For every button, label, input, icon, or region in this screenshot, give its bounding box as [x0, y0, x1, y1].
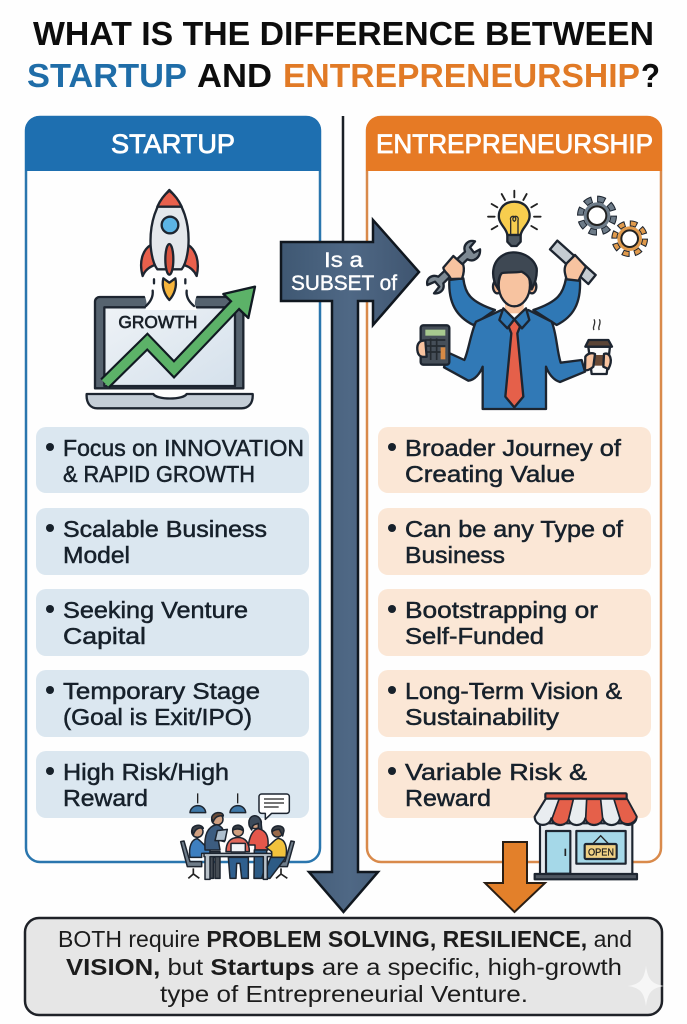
- entrepreneurship point 2: Can be any Type of: [405, 516, 624, 542]
- entrepreneurship point 1: [378, 427, 651, 493]
- back arms: [449, 278, 580, 325]
- entrepreneurship point 2: Business: [405, 542, 505, 568]
- title: ENTREPRENEURSHIP: [283, 57, 640, 94]
- callout: conclusion: BOTH require PROBLEM SOLVING, RESILIENCE, and: [58, 926, 632, 952]
- startup point 4: Temporary Stage: [63, 678, 260, 704]
- entrepreneurship point 4: Long-Term Vision &: [405, 678, 622, 704]
- panel: startup: [25, 116, 321, 862]
- startup point 3: Seeking Venture: [63, 597, 248, 623]
- head: [493, 252, 537, 313]
- startup point 1: Focus on INNOVATION: [63, 435, 304, 461]
- entrepreneurship point 3: Self-Funded: [405, 623, 544, 649]
- startup point 5: [36, 751, 309, 818]
- entrepreneurship point 5: Variable Risk &: [405, 759, 587, 785]
- icon: light bulb: [488, 191, 541, 246]
- calculator: [417, 325, 449, 365]
- startup point 3: Capital: [63, 623, 146, 649]
- panel: startup: STARTUP: [111, 129, 235, 159]
- hands up: [443, 255, 586, 281]
- panel: entrepreneurship: ENTREPRENEURSHIP: [376, 129, 653, 159]
- startup point 2: Model: [63, 542, 130, 568]
- body: [444, 310, 585, 409]
- startup point 1: [36, 427, 309, 493]
- title: STARTUP: [27, 57, 187, 94]
- entrepreneurship point 3: Bootstrapping or: [405, 597, 598, 623]
- entrepreneurship point 1: Creating Value: [405, 461, 575, 487]
- icon: rocket and growth laptop: [87, 190, 255, 408]
- title: [27, 15, 660, 94]
- ruler: [550, 241, 596, 284]
- panel: entrepreneurship: [366, 116, 662, 862]
- startup point 2: Scalable Business: [63, 516, 267, 542]
- arrow label: Is a: [324, 249, 363, 272]
- arrow label: SUBSET of: [291, 272, 397, 295]
- icon: multitasking entrepreneur: [417, 191, 645, 409]
- startup point 1: & RAPID GROWTH: [63, 461, 255, 487]
- title: AND: [197, 57, 272, 94]
- startup point 2: [36, 508, 309, 575]
- startup point 4: [36, 670, 309, 737]
- arrow: orange down: [485, 842, 545, 912]
- callout: conclusion: VISION, but Startups are a specific, high-growth: [66, 954, 622, 980]
- entrepreneurship point 1: Broader Journey of: [405, 435, 622, 461]
- startup point 5: Reward: [63, 785, 148, 811]
- arrow label: [291, 249, 397, 295]
- icon: team around table: [181, 793, 294, 879]
- entrepreneurship point 5: [378, 751, 651, 818]
- title: ?: [641, 57, 660, 94]
- startup point 3: [36, 589, 309, 656]
- icon: storefront: OPEN: [588, 848, 614, 859]
- arrow: subset connector: [281, 116, 419, 912]
- sparkle watermark: [628, 966, 664, 1006]
- startup point 4: (Goal is Exit/IPO): [63, 704, 252, 730]
- entrepreneurship point 4: Sustainability: [405, 704, 560, 730]
- icon: gears: [580, 199, 645, 254]
- icon: rocket and growth laptop: GROWTH: [118, 312, 197, 332]
- title: WHAT IS THE DIFFERENCE BETWEEN: [33, 15, 654, 52]
- entrepreneurship point 4: [378, 670, 651, 737]
- startup point 5: High Risk/High: [63, 759, 229, 785]
- wrench: [427, 241, 480, 293]
- callout: conclusion: type of Entrepreneurial Venture.: [160, 981, 528, 1007]
- entrepreneurship point 2: [378, 508, 651, 575]
- tie and collar: [499, 308, 529, 407]
- icon: storefront: [535, 793, 637, 879]
- coffee cup: [585, 319, 612, 374]
- entrepreneurship point 3: [378, 589, 651, 656]
- entrepreneurship point 5: Reward: [405, 785, 491, 811]
- callout: conclusion: [25, 918, 662, 1015]
